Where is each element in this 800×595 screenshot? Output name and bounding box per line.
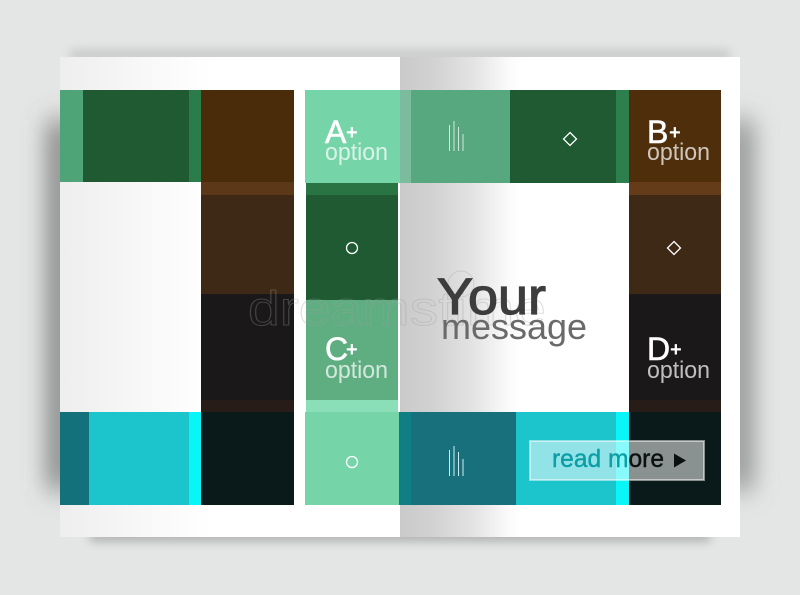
read more button [530, 441, 704, 480]
teal row tiles [399, 412, 629, 505]
icon: bars on teal tile [450, 446, 463, 476]
watermark: dreamstime [248, 283, 546, 336]
A+ option label: A [325, 114, 347, 150]
watermark [248, 271, 546, 336]
B+ option label: + [669, 122, 681, 144]
left brochure page [60, 57, 400, 537]
A+ option label: + [346, 122, 358, 144]
icon: circle on light green tile [346, 456, 358, 468]
icon: bars on green tile [450, 121, 463, 151]
green tile column [305, 90, 400, 505]
D+ option label: + [670, 339, 682, 361]
icon: diamond on brown tile [668, 242, 680, 254]
B+ option label: B [647, 114, 668, 150]
C+ option label: option [325, 357, 388, 384]
A+ option label [325, 114, 388, 166]
C+ option label: C [325, 331, 348, 367]
left page teal row tiles [60, 412, 201, 505]
D+ option label: option [647, 357, 710, 384]
icon: diamond on dark green tile [564, 132, 576, 146]
left page top row tiles [60, 90, 201, 182]
read more button: read more [552, 445, 664, 473]
A+ option label: option [325, 139, 388, 166]
D+ option label [647, 331, 710, 384]
B+ option label [647, 114, 710, 166]
icon: circle on dark green tile [346, 242, 358, 254]
left page brown and black column [201, 90, 294, 505]
brown and black column [629, 90, 721, 505]
C+ option label [325, 331, 388, 384]
right brochure page [305, 57, 740, 537]
B+ option label: option [647, 139, 710, 166]
D+ option label: D [647, 331, 670, 367]
subheading: message: message [441, 306, 587, 347]
C+ option label: + [346, 339, 358, 361]
headline: Your: Your [437, 268, 546, 325]
page drop shadows [50, 50, 750, 541]
top row tiles [400, 90, 629, 183]
